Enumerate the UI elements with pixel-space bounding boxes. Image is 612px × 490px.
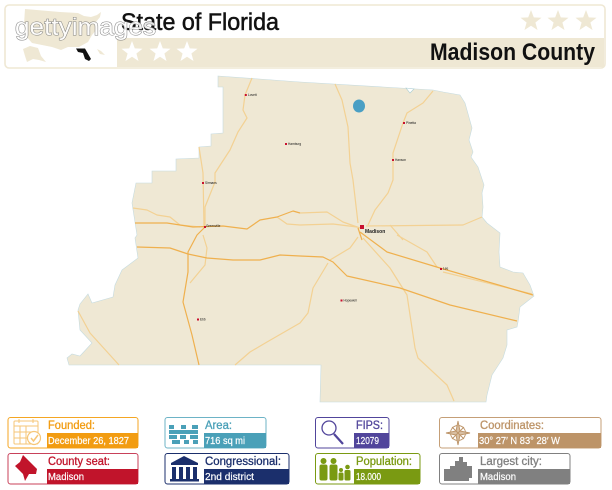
icon: county seat shape [15,455,37,481]
label: Founded: [48,420,95,432]
label: Congressional: [205,456,281,468]
value: December 26, 1827 [48,435,129,447]
town: Ebb [197,318,206,322]
town: Pinetta: Pinetta [406,121,416,125]
icon: US map with Florida [23,9,105,62]
value band [204,433,266,448]
value band [47,469,138,484]
header band [117,38,604,67]
town: Lee [440,266,449,270]
pond [406,88,414,93]
stars right [520,10,596,30]
header frame [5,5,605,68]
town: Lovett: Lovett [248,93,257,97]
value band [478,433,601,448]
town: Hanson: Hanson [395,158,406,162]
minor roads [78,78,532,401]
label: Coordinates: [480,420,544,432]
panel: founded [8,418,138,448]
icon: magnifier [322,421,343,444]
panel: county seat [8,454,138,484]
town: Ebb: Ebb [200,318,206,322]
town: Hopewell: Hopewell [344,298,357,302]
value band [354,433,389,448]
icon: skyline [444,457,472,481]
header banner [5,5,605,68]
value band [204,469,289,484]
icon: family [320,458,350,480]
stars left [122,41,198,61]
icon: area grid [169,425,198,444]
panel: FIPS [316,418,389,448]
title: State of Florida [121,9,280,36]
town: Greenville: Greenville [206,224,221,228]
value: 2nd district [205,471,254,483]
panel: population [316,454,420,484]
town: Madison [360,225,385,235]
label: FIPS: [356,420,383,432]
label: Largest city: [480,456,542,468]
map: Madison County [67,76,534,402]
label: Area: [205,420,232,432]
town: Hamburg: Hamburg [288,142,301,146]
icon: calendar [14,419,40,444]
value: Madison [480,471,516,483]
town: Sirmans: Sirmans [205,181,217,185]
icon: government building [170,456,199,482]
label: Population: [356,456,412,468]
value: 30° 27′ N 83° 28′ W [479,435,560,447]
label: County seat: [48,456,110,468]
value band [478,469,570,484]
panel: congressional [165,454,289,484]
county name: Madison County [430,39,596,66]
icon: compass rose [446,421,470,445]
value: 18.000 [356,471,381,483]
panel: coordinates [440,418,601,448]
value: Madison [48,471,84,483]
lake [353,100,365,112]
value: 716 sq mi [205,435,245,447]
major roads [135,211,533,365]
town: Lee: Lee [443,266,449,270]
value: 12079 [356,435,379,447]
county shape [67,76,534,402]
icon: Florida [76,48,91,61]
watermark: gettyimages [15,14,156,41]
panel: largest city [440,454,570,484]
town: Madison: Madison [365,229,385,235]
value band [47,433,138,448]
value band [354,469,420,484]
panel: area [165,418,266,448]
